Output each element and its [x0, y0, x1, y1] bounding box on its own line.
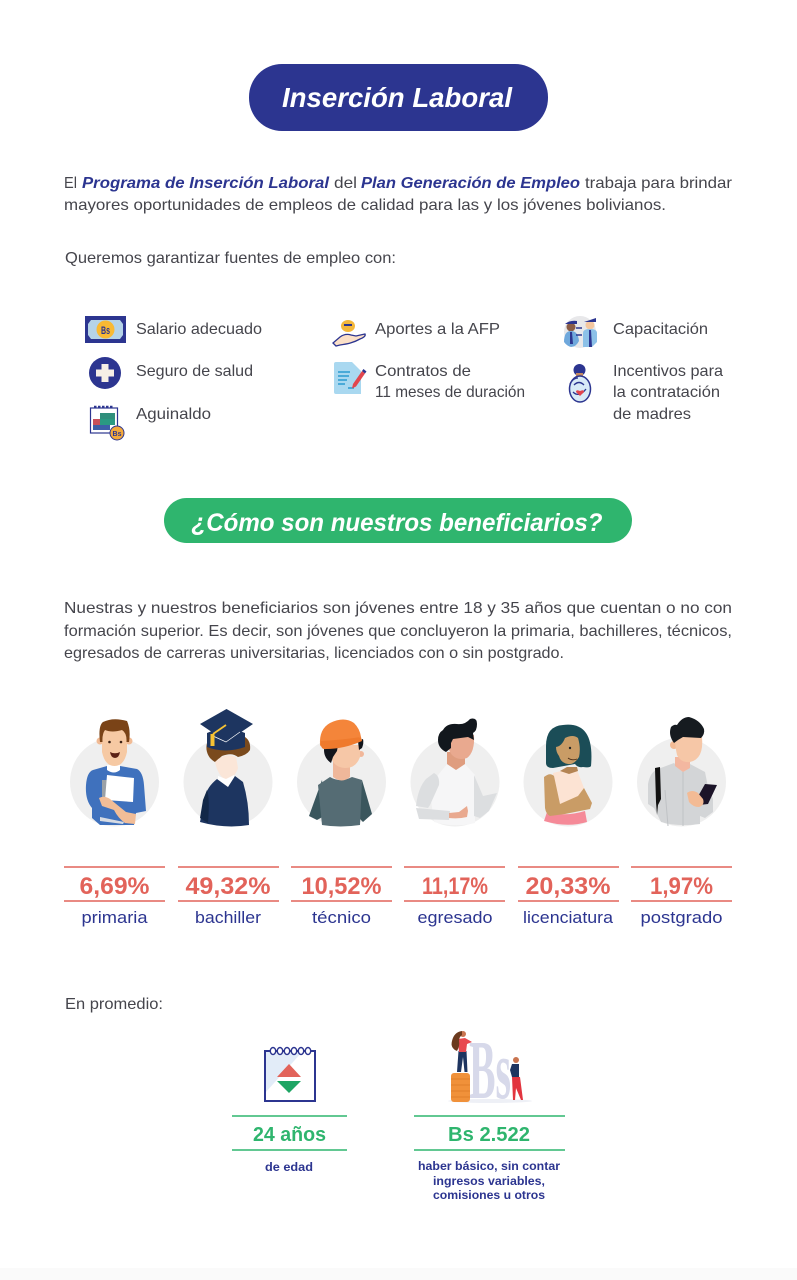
- text block: description: Nuestras y nuestros beneficiarios son jóvenes entre 18 y 35 años que cuentan o no con: [64, 600, 732, 617]
- icon: salary banknote: Bs: [101, 325, 110, 337]
- icon: calendar: [265, 1048, 315, 1101]
- title: Inserción Laboral: [249, 64, 548, 131]
- illustration: postgrado: [637, 717, 726, 826]
- panel: education stats: [64, 867, 732, 927]
- illustration: Bs coins and people: [448, 1024, 532, 1117]
- text block: intro: El: [64, 175, 77, 192]
- stat: salary: comisiones u otros: [433, 1188, 545, 1202]
- icon: salary banknote: [85, 316, 126, 343]
- heading: beneficiarios: ¿Cómo son nuestros beneficiarios?: [192, 509, 602, 537]
- panel: average age: [232, 1048, 347, 1174]
- stat: postgrado: 1,97%: [650, 873, 713, 900]
- label: capacitación: Capacitación: [613, 321, 708, 338]
- label: incentivos: de madres: [613, 406, 691, 423]
- text block: intro: Plan Generación de Empleo: [361, 175, 580, 192]
- stat: salary: Bs 2.522: [448, 1124, 530, 1146]
- stat: salary: [414, 1116, 565, 1202]
- illustration: licenciatura: [524, 725, 612, 826]
- text block: intro: mayores oportunidades de empleos de calidad para las y los jóvenes bolivianos.: [64, 197, 666, 214]
- text block: guarantee lead-in: Queremos garantizar fuentes de empleo con:: [65, 250, 396, 267]
- label: aguinaldo: Aguinaldo: [136, 406, 211, 423]
- icon: training: [564, 316, 597, 348]
- stat: primaria: 6,69%: [80, 873, 150, 900]
- label: contratos 2: 11 meses de duración: [375, 384, 525, 401]
- label: seguro: Seguro de salud: [136, 363, 253, 380]
- illustration: graduate: [184, 709, 272, 826]
- stat: bachiller: [178, 867, 279, 927]
- stat: técnico: [291, 867, 392, 927]
- stat: egresado: egresado: [418, 908, 492, 927]
- panel: benefits list: [85, 316, 723, 440]
- text block: description: egresados de carreras universitarias, licenciados con o sin postgrado.: [64, 645, 564, 662]
- stat: postgrado: postgrado: [640, 908, 722, 927]
- stat: licenciatura: [518, 867, 619, 927]
- stat: primaria: [64, 867, 165, 927]
- label: incentivos: [613, 363, 723, 423]
- title: Inserción Laboral: Inserción Laboral: [282, 82, 513, 113]
- panel: average salary: [414, 1024, 565, 1202]
- label: contratos: Contratos de: [375, 363, 471, 380]
- stat: age: [232, 1116, 347, 1174]
- panel: education profiles: [70, 709, 726, 826]
- icon: mother: [570, 364, 590, 402]
- stat: licenciatura: licenciatura: [523, 908, 614, 927]
- label: aportes: Aportes a la AFP: [375, 321, 500, 338]
- text block: intro: [64, 175, 733, 214]
- illustration: técnico: [297, 720, 386, 826]
- stat: salary: ingresos variables,: [433, 1174, 545, 1188]
- heading: beneficiarios: [164, 498, 632, 543]
- illustration: primaria student: [70, 719, 159, 826]
- illustration: egresado: [410, 719, 500, 826]
- icon: contract: [334, 362, 366, 394]
- stat: postgrado: [631, 867, 732, 927]
- stat: age: de edad: [265, 1160, 313, 1174]
- text block: en promedio: En promedio:: [65, 996, 163, 1013]
- stat: egresado: [404, 867, 505, 927]
- label: incentivos: Incentivos para: [613, 363, 723, 380]
- stat: técnico: técnico: [312, 908, 371, 927]
- stat: egresado: 11,17%: [422, 873, 488, 900]
- text block: intro: Programa de Inserción Laboral: [82, 175, 330, 192]
- text block: description: [64, 600, 732, 662]
- icon: health cross: [89, 357, 121, 389]
- text block: description: formación superior. Es decir, son jóvenes que concluyeron la primaria, bachilleres, técnicos,: [64, 623, 732, 640]
- stat: bachiller: bachiller: [195, 908, 261, 927]
- stat: primaria: primaria: [82, 908, 148, 927]
- label: incentivos: la contratación: [613, 384, 720, 401]
- stat: salary: haber básico, sin contar: [418, 1159, 560, 1173]
- icon: calendar with coin: [90, 407, 124, 440]
- label: salario: Salario adecuado: [136, 321, 262, 338]
- stat: licenciatura: 20,33%: [526, 873, 610, 900]
- icon: calendar with coin: Bs: [113, 431, 122, 438]
- stat: técnico: 10,52%: [302, 873, 382, 900]
- illustration: Bs coins and people: Bs: [469, 1024, 511, 1117]
- text block: intro: trabaja para brindar: [585, 175, 733, 192]
- stat: age: 24 años: [253, 1124, 326, 1146]
- text block: intro: del: [334, 175, 357, 192]
- icon: hand with coin: [333, 320, 365, 346]
- stat: bachiller: 49,32%: [186, 873, 270, 900]
